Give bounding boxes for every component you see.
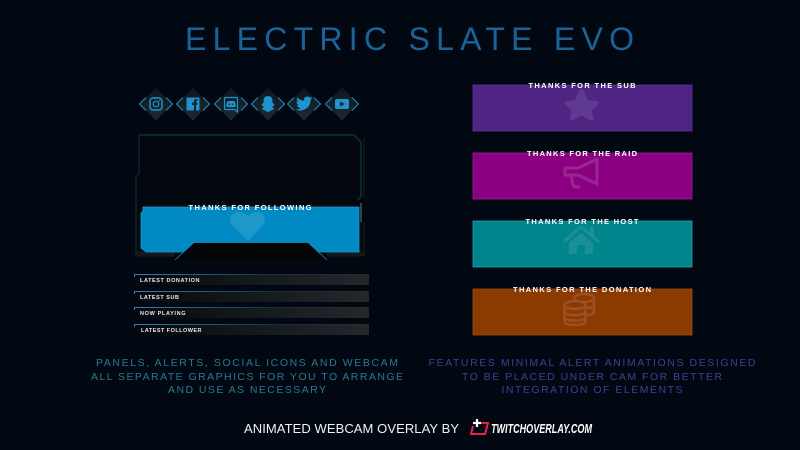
panel: latest sub	[134, 291, 369, 302]
icon: twitter	[288, 88, 320, 120]
panel: latest donation: LATEST DONATION	[140, 278, 200, 284]
text block: right description	[428, 357, 756, 396]
webcam frame	[135, 131, 366, 260]
icon: house	[563, 225, 600, 254]
text block: left description	[91, 357, 403, 396]
panel: now playing: NOW PLAYING	[140, 311, 186, 317]
text block: left description: ALL SEPARATE GRAPHICS FOR YOU TO ARRANGE	[91, 371, 403, 383]
panel: latest follower	[134, 324, 369, 335]
panel: latest follower: LATEST FOLLOWER	[141, 328, 202, 334]
icon: discord	[214, 88, 248, 120]
panel: latest donation	[134, 274, 369, 285]
info panels	[134, 274, 369, 335]
alert: host: THANKS FOR THE HOST	[526, 217, 639, 226]
brand name: TWITCHOVERLAY.COM	[491, 421, 593, 436]
panel: now playing	[134, 307, 369, 318]
icon: star	[566, 91, 596, 118]
icon: megaphone	[565, 159, 597, 187]
icon: heart	[230, 212, 265, 241]
icon: twitchoverlay logo	[471, 419, 488, 434]
text block: left description: PANELS, ALERTS, SOCIAL ICONS AND WEBCAM	[96, 357, 398, 369]
alert panel: follow	[141, 207, 359, 252]
title: ELECTRIC SLATE EVO	[185, 21, 634, 57]
alert label: follow: THANKS FOR FOLLOWING	[188, 203, 312, 212]
alert: sub: THANKS FOR THE SUB	[528, 81, 636, 90]
icon: snapchat	[252, 88, 284, 120]
panel: latest sub: LATEST SUB	[140, 295, 179, 301]
alert: raid	[473, 149, 692, 199]
alert: host	[473, 217, 692, 267]
alert: donation: THANKS FOR THE DONATION	[513, 285, 651, 294]
alert: donation	[473, 285, 692, 335]
icon: coins	[564, 294, 594, 325]
alert: sub	[473, 81, 692, 131]
alert: raid: THANKS FOR THE RAID	[527, 149, 638, 158]
icon: facebook	[176, 88, 210, 120]
text block: left description: AND USE AS NECESSARY	[168, 384, 326, 396]
footer credit: ANIMATED WEBCAM OVERLAY BY	[244, 421, 459, 436]
text block: right description: TO BE PLACED UNDER CAM FOR BETTER	[462, 371, 722, 383]
text block: right description: FEATURES MINIMAL ALERT ANIMATIONS DESIGNED	[428, 357, 756, 369]
icon: instagram	[140, 88, 172, 120]
icon: youtube	[326, 88, 358, 120]
text block: right description: INTEGRATION OF ELEMENTS	[502, 384, 682, 396]
social icons row	[140, 88, 358, 120]
bottom notch	[175, 242, 327, 260]
frame body	[135, 131, 366, 260]
